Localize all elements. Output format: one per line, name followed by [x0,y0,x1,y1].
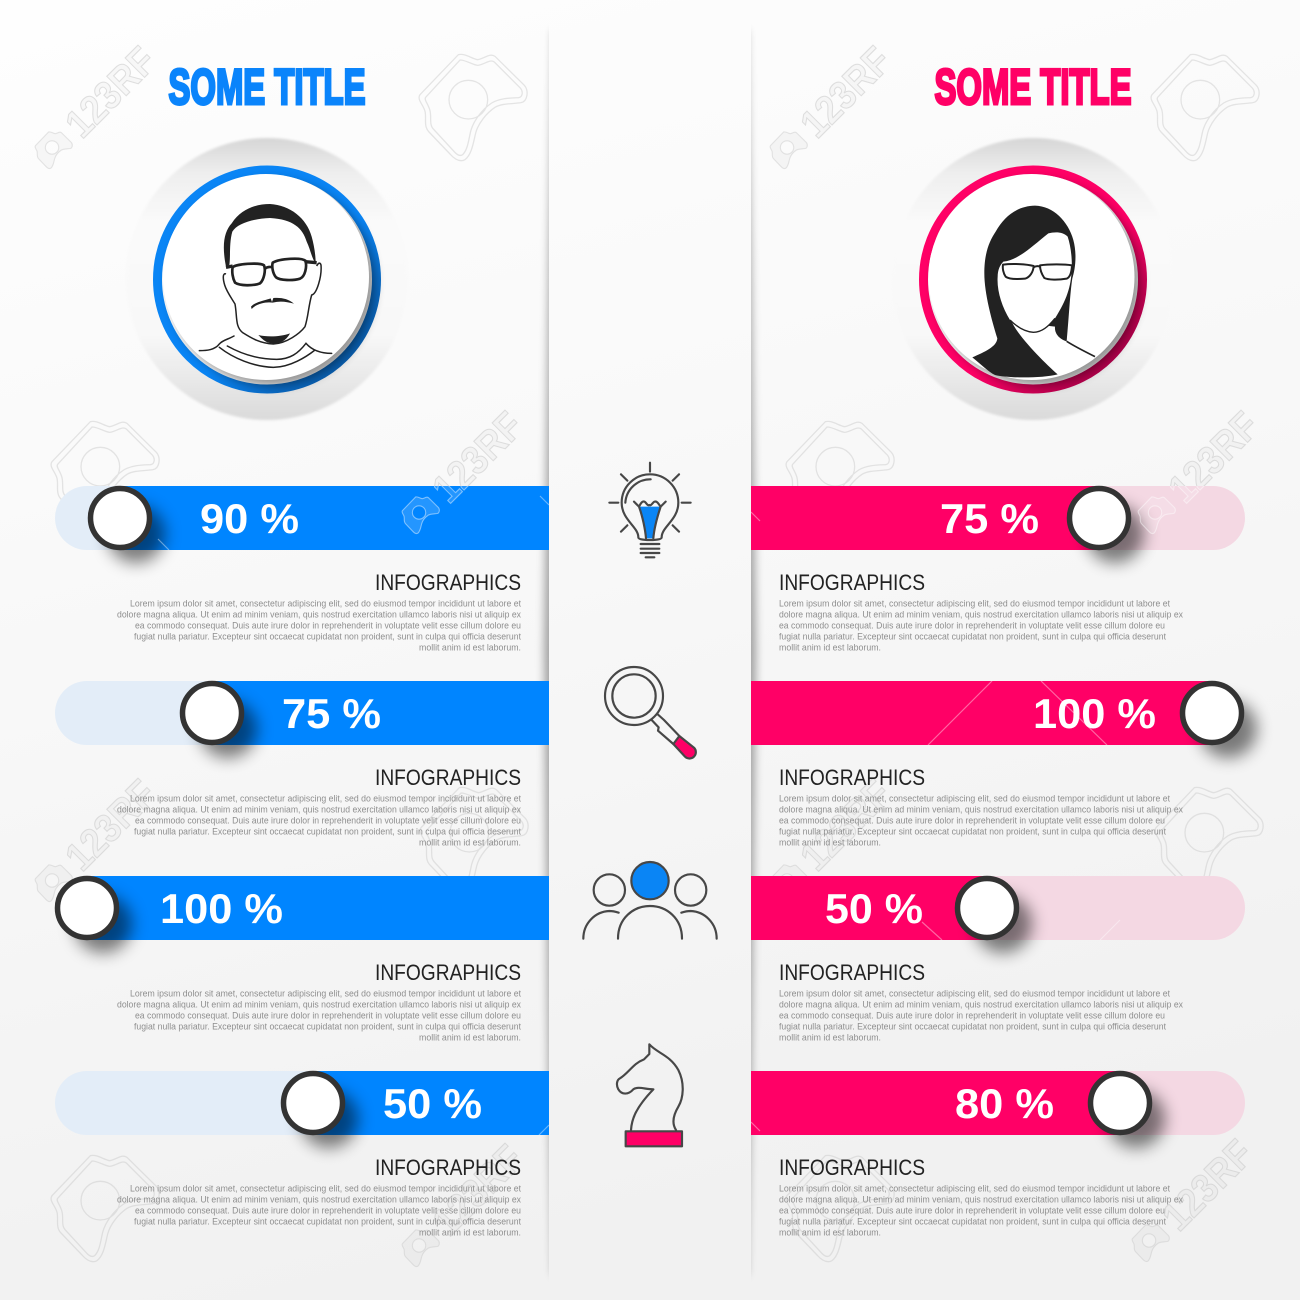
right text block 2: Lorem ipsum dolor sit amet, consectetur adipiscing elit, sed do eiusmod tempor incididunt ut labore et [779,794,1170,805]
left text block 2: Lorem ipsum dolor sit amet, consectetur adipiscing elit, sed do eiusmod tempor incididunt ut labore et [130,794,521,805]
percent value: 80 % [955,1080,1054,1127]
text: 123RF [424,1137,532,1244]
center column panel [544,0,756,1300]
right text block 3: mollit anim id est laborum. [779,1033,881,1044]
left text block 4: dolore magna aliqua. Ut enim ad minim veniam, quis nostrud exercitation ullamco laboris nisi ut aliquip ex [117,1195,521,1206]
right text block 4: dolore magna aliqua. Ut enim ad minim veniam, quis nostrud exercitation ullamco laboris nisi ut aliquip ex [779,1195,1183,1206]
percent value: 75 % [940,495,1039,542]
text: 123RF [792,772,900,879]
text: 123RF [424,404,532,511]
right text block 2 [779,765,1183,849]
left text block 3: ea commodo consequat. Duis aute irure dolor in reprehenderit in voluptate velit esse cillum dolore eu [135,1011,521,1022]
left text block 3: fugiat nulla pariatur. Excepteur sint occaecat cupidatat non proident, sunt in culpa qui officia deserunt [134,1022,521,1033]
percent value: 100 % [1033,690,1156,737]
text: 123RF [1160,404,1268,511]
left text block 1: Lorem ipsum dolor sit amet, consectetur adipiscing elit, sed do eiusmod tempor incididunt ut labore et [130,599,521,610]
text: 123RF [424,404,532,511]
right title: SOME TITLE [934,59,1132,115]
text: 123RF [1160,404,1268,511]
right text block 1: ea commodo consequat. Duis aute irure dolor in reprehenderit in voluptate velit esse cillum dolore eu [779,621,1165,632]
left text block 2: mollit anim id est laborum. [419,838,521,849]
percent value: 90 % [200,495,299,542]
right text block 1: dolore magna aliqua. Ut enim ad minim veniam, quis nostrud exercitation ullamco laboris nisi ut aliquip ex [779,610,1183,621]
right text block 3: dolore magna aliqua. Ut enim ad minim veniam, quis nostrud exercitation ullamco laboris nisi ut aliquip ex [779,1000,1183,1011]
right text block 1: mollit anim id est laborum. [779,643,881,654]
right text block 2: mollit anim id est laborum. [779,838,881,849]
right text block 3: INFOGRAPHICS [779,960,925,985]
right text block 1: INFOGRAPHICS [779,570,925,595]
percent value: 50 % [825,885,923,932]
left text block 2: dolore magna aliqua. Ut enim ad minim veniam, quis nostrud exercitation ullamco laboris nisi ut aliquip ex [117,805,521,816]
right text block 4: ea commodo consequat. Duis aute irure dolor in reprehenderit in voluptate velit esse cillum dolore eu [779,1206,1165,1217]
right bar 3: 50 % [751,876,1245,953]
right text block 3: Lorem ipsum dolor sit amet, consectetur adipiscing elit, sed do eiusmod tempor incididunt ut labore et [779,989,1170,1000]
right text block 2: INFOGRAPHICS [779,765,925,790]
right text block 3 [779,960,1183,1044]
left text block 1: dolore magna aliqua. Ut enim ad minim veniam, quis nostrud exercitation ullamco laboris nisi ut aliquip ex [117,610,521,621]
left text block 2: fugiat nulla pariatur. Excepteur sint occaecat cupidatat non proident, sunt in culpa qui officia deserunt [134,827,521,838]
left text block 4: fugiat nulla pariatur. Excepteur sint occaecat cupidatat non proident, sunt in culpa qui officia deserunt [134,1217,521,1228]
knob [90,488,150,548]
right text block 3: fugiat nulla pariatur. Excepteur sint occaecat cupidatat non proident, sunt in culpa qui officia deserunt [779,1022,1166,1033]
right text block 3: ea commodo consequat. Duis aute irure dolor in reprehenderit in voluptate velit esse cillum dolore eu [779,1011,1165,1022]
knob [958,878,1016,938]
left text block 3: Lorem ipsum dolor sit amet, consectetur adipiscing elit, sed do eiusmod tempor incididunt ut labore et [130,989,521,1000]
left text block 4 [117,1155,521,1239]
left text block 4: INFOGRAPHICS [375,1155,521,1180]
left bar 4: 50 % [55,1071,549,1148]
right text block 4: Lorem ipsum dolor sit amet, consectetur adipiscing elit, sed do eiusmod tempor incididunt ut labore et [779,1184,1170,1195]
avatar badge: man [126,138,408,420]
icon: light bulb [609,463,691,557]
left bar 1: 90 % [55,486,549,563]
percent value: 75 % [282,690,381,737]
knob [182,684,242,742]
left title: SOME TITLE [168,59,366,115]
knob [58,878,116,938]
knob [1182,684,1242,742]
text: 123RF [57,772,165,879]
right text block 2: ea commodo consequat. Duis aute irure dolor in reprehenderit in voluptate velit esse cillum dolore eu [779,816,1165,827]
percent value: 50 % [383,1080,482,1127]
left text block 1: fugiat nulla pariatur. Excepteur sint occaecat cupidatat non proident, sunt in culpa qui officia deserunt [134,632,521,643]
text: 123RF [1154,1132,1262,1239]
left text block 1: ea commodo consequat. Duis aute irure dolor in reprehenderit in voluptate velit esse cillum dolore eu [135,621,521,632]
right text block 1: fugiat nulla pariatur. Excepteur sint occaecat cupidatat non proident, sunt in culpa qui officia deserunt [779,632,1166,643]
right text block 4: INFOGRAPHICS [779,1155,925,1180]
left text block 3: INFOGRAPHICS [375,960,521,985]
left text block 4: mollit anim id est laborum. [419,1228,521,1239]
right bar 1: 75 % [751,486,1245,563]
text: 123RF [57,39,165,146]
icon: magnifying glass [605,667,696,759]
right text block 2: fugiat nulla pariatur. Excepteur sint occaecat cupidatat non proident, sunt in culpa qui officia deserunt [779,827,1166,838]
icon: woman portrait [972,206,1095,377]
right text block 1: Lorem ipsum dolor sit amet, consectetur adipiscing elit, sed do eiusmod tempor incididunt ut labore et [779,599,1170,610]
left bar 3: 100 % [58,876,549,953]
right bar 2: 100 % [751,681,1257,758]
right bar 4: 80 % [751,1071,1245,1148]
right text block 4: mollit anim id est laborum. [779,1228,881,1239]
knob [1090,1074,1150,1132]
left bar 2: 75 % [55,681,549,758]
right text block 1 [779,570,1183,654]
left text block 2: ea commodo consequat. Duis aute irure dolor in reprehenderit in voluptate velit esse cillum dolore eu [135,816,521,827]
knob [1070,488,1128,548]
left text block 3: mollit anim id est laborum. [419,1033,521,1044]
icon: chess knight [617,1044,683,1146]
right text block 4: fugiat nulla pariatur. Excepteur sint occaecat cupidatat non proident, sunt in culpa qui officia deserunt [779,1217,1166,1228]
left text block 3: dolore magna aliqua. Ut enim ad minim veniam, quis nostrud exercitation ullamco laboris nisi ut aliquip ex [117,1000,521,1011]
right text block 2: dolore magna aliqua. Ut enim ad minim veniam, quis nostrud exercitation ullamco laboris nisi ut aliquip ex [779,805,1183,816]
left text block 4: Lorem ipsum dolor sit amet, consectetur adipiscing elit, sed do eiusmod tempor incididunt ut labore et [130,1184,521,1195]
left text block 1 [117,570,521,654]
icon: team of people [583,862,717,939]
avatar badge: woman [892,138,1174,420]
percent value: 100 % [160,885,283,932]
left text block 2 [117,765,521,849]
left text block 4: ea commodo consequat. Duis aute irure dolor in reprehenderit in voluptate velit esse cillum dolore eu [135,1206,521,1217]
left text block 1: mollit anim id est laborum. [419,643,521,654]
left text block 1: INFOGRAPHICS [375,570,521,595]
left text block 2: INFOGRAPHICS [375,765,521,790]
text: 123RF [792,39,900,146]
icon: man portrait [199,204,332,367]
right text block 4 [779,1155,1183,1239]
knob [284,1074,342,1132]
left text block 3 [117,960,521,1044]
